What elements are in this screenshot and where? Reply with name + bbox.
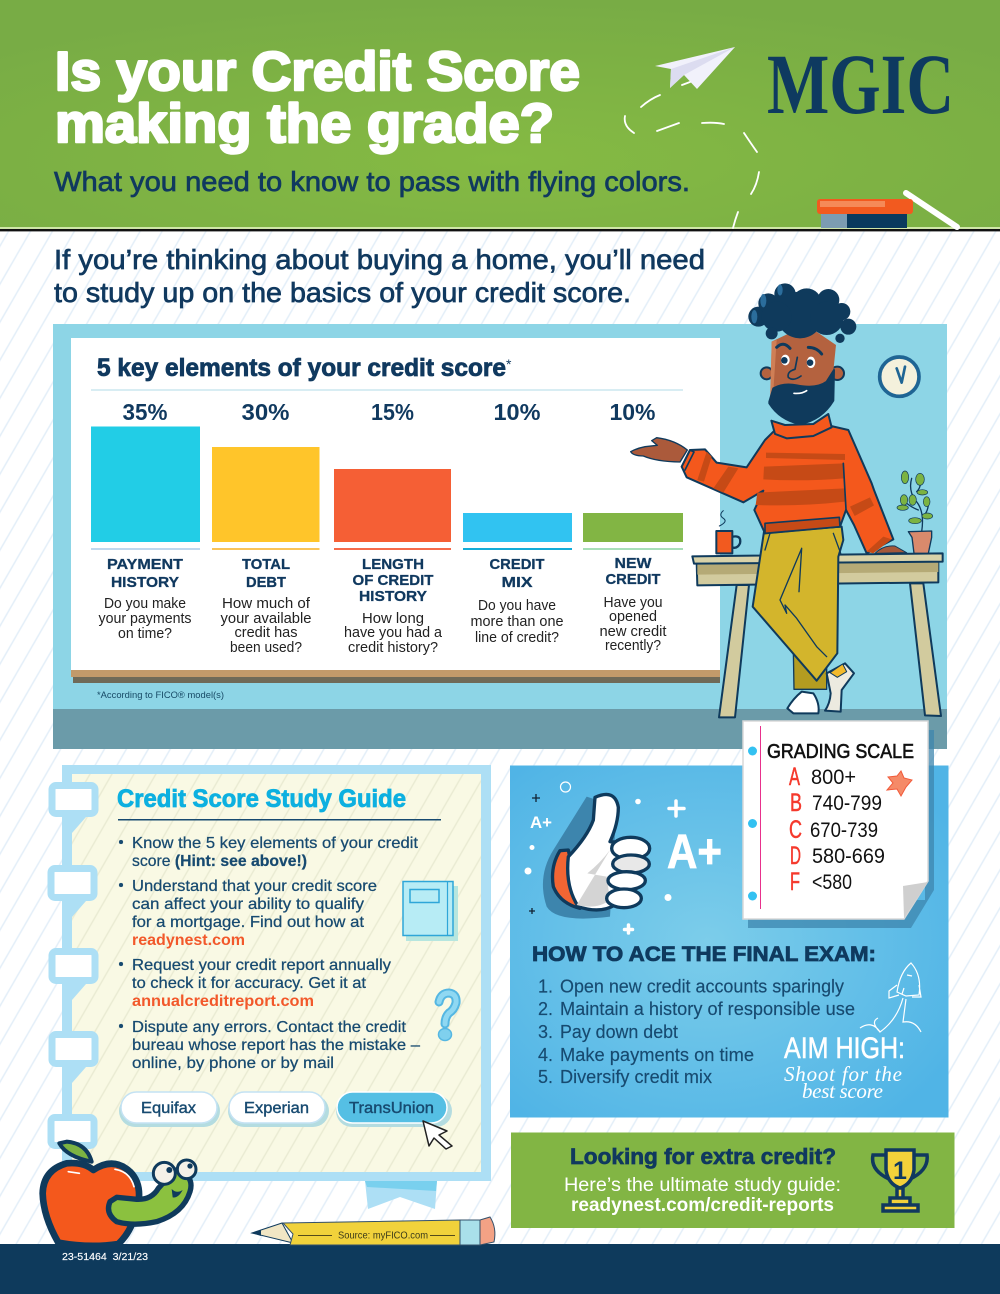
column labels: MIX xyxy=(502,574,532,591)
apple xyxy=(43,1142,139,1246)
numbered list: Maintain a history of responsible use xyxy=(560,999,855,1019)
panel: study guide notebook xyxy=(51,765,491,1181)
title xyxy=(55,40,580,154)
bar chart: 10% xyxy=(494,399,540,425)
bureau buttons: Equifax xyxy=(141,1100,196,1117)
grades: C xyxy=(789,816,802,844)
score ranges: 800+ xyxy=(811,766,856,789)
title: making the grade? xyxy=(55,92,554,154)
section heading: HOW TO ACE THE FINAL EXAM: xyxy=(532,943,876,966)
intro text: to study up on the basics of your credit score. xyxy=(54,277,631,308)
column labels: CREDIT xyxy=(606,571,660,588)
bullet list: bureau whose report has the mistake – xyxy=(132,1037,420,1054)
bullet list: Request your credit report annually xyxy=(132,957,391,974)
banner heading: Looking for extra credit? xyxy=(570,1144,836,1169)
subtitle: What you need to know to pass with flying colors. xyxy=(54,166,690,197)
numbered list: Open new credit accounts sparingly xyxy=(560,976,844,996)
panel: classroom wall xyxy=(53,324,947,749)
ribbon bookmark xyxy=(365,1181,437,1209)
column labels: DEBT xyxy=(246,574,286,591)
aim high text xyxy=(784,1032,905,1103)
numbered list: 4. xyxy=(538,1045,553,1065)
trousers xyxy=(753,527,843,681)
score ranges: <580 xyxy=(812,871,852,894)
bar chart xyxy=(91,399,683,550)
aim high text: best score xyxy=(802,1079,883,1103)
panel: how to ace the final exam xyxy=(510,766,948,1118)
column descriptions: How long xyxy=(362,611,424,627)
collar xyxy=(771,414,832,438)
icon: pencil with source xyxy=(252,1217,495,1245)
grading heading: GRADING SCALE xyxy=(767,741,914,763)
column labels: OF CREDIT xyxy=(352,572,434,589)
icon: potted plant xyxy=(897,471,933,553)
numbered list: Make payments on time xyxy=(560,1045,754,1065)
worm xyxy=(108,1160,196,1224)
score ranges xyxy=(810,766,885,894)
bullet list: online, by phone or by mail xyxy=(132,1055,334,1072)
intro text: If you’re thinking about buying a home, you’ll need xyxy=(54,244,705,275)
bar chart: 30% xyxy=(242,399,290,425)
column descriptions: new credit xyxy=(600,624,666,640)
column labels: HISTORY xyxy=(111,574,179,591)
banner text: Here’s the ultimate study guide: xyxy=(564,1175,841,1196)
bureau buttons: TransUnion xyxy=(349,1100,434,1117)
header banner xyxy=(0,0,1000,231)
column descriptions: How much of xyxy=(222,596,311,612)
bureau buttons: Experian xyxy=(244,1100,309,1117)
column descriptions: recently? xyxy=(605,638,661,654)
column labels: PAYMENT xyxy=(107,556,183,573)
column descriptions: opened xyxy=(609,609,657,625)
icon: chalk rocket xyxy=(860,963,921,1032)
grades: F xyxy=(790,868,800,896)
head xyxy=(748,283,856,424)
bar chart: 35% xyxy=(122,399,168,425)
score ranges: 670-739 xyxy=(810,819,878,842)
bullet list: score (Hint: see above!) xyxy=(132,853,307,870)
desk xyxy=(692,553,943,717)
numbered list: 1. xyxy=(538,976,553,996)
icon: book xyxy=(403,882,458,941)
banner text xyxy=(564,1175,841,1216)
sweater xyxy=(682,425,893,553)
column descriptions: Do you have xyxy=(478,598,556,614)
supporting hand xyxy=(875,546,907,553)
aim high text: Shoot for the xyxy=(784,1062,902,1086)
icon: star xyxy=(887,771,912,796)
bullet list: for a mortgage. Find out how at xyxy=(132,914,365,931)
grades: B xyxy=(790,789,802,817)
panel: whiteboard with chart xyxy=(71,338,720,683)
icon: sparkle decorations: A+ xyxy=(530,813,552,832)
numbered list: 5. xyxy=(538,1067,553,1087)
column descriptions: more than one xyxy=(470,614,564,630)
notebook rings xyxy=(51,786,95,1146)
bar chart: 15% xyxy=(371,399,414,425)
bullet list: readynest.com xyxy=(132,932,245,949)
column labels: CREDIT xyxy=(490,556,544,573)
bullet list: annualcreditreport.com xyxy=(132,993,314,1010)
bullet list xyxy=(119,835,420,1072)
icon: clock xyxy=(880,357,919,396)
illustration: teacher at desk xyxy=(631,283,943,717)
back leg and shoes xyxy=(787,650,854,713)
column labels xyxy=(107,555,660,605)
arm hand xyxy=(631,438,687,462)
grades: D xyxy=(790,842,801,870)
grades: A xyxy=(789,763,800,791)
icon: book and chalk on ledge xyxy=(817,193,957,228)
column descriptions: your payments xyxy=(98,611,192,627)
panel: extra credit banner xyxy=(511,1132,954,1228)
column descriptions: line of credit? xyxy=(475,630,559,646)
document number: 23-51464 3/21/23 xyxy=(62,1252,148,1263)
bullet list: can affect your ability to qualify xyxy=(132,896,364,913)
banner text: readynest.com/credit-reports xyxy=(571,1195,834,1216)
bullet list: to check it for accuracy. Get it at xyxy=(132,975,367,992)
column descriptions xyxy=(98,595,666,656)
column labels: TOTAL xyxy=(242,556,290,573)
icon: thumbs up xyxy=(543,794,650,919)
column descriptions: have you had a xyxy=(344,625,443,641)
numbered list xyxy=(538,976,855,1087)
guide title: Credit Score Study Guide xyxy=(117,785,406,813)
icon: coffee mug xyxy=(716,511,740,553)
column descriptions: on time? xyxy=(118,626,172,642)
footnote: *According to FICO® model(s) xyxy=(97,690,224,701)
bullet list: Dispute any errors. Contact the credit xyxy=(132,1019,407,1036)
icon: cursor xyxy=(423,1121,452,1149)
source text: Source: myFICO.com xyxy=(338,1230,428,1242)
column labels: HISTORY xyxy=(359,588,427,605)
numbered list: 3. xyxy=(538,1022,553,1042)
title: Is your Credit Score xyxy=(55,40,580,102)
grading scale paper xyxy=(743,721,934,928)
chart heading: * xyxy=(506,356,512,372)
icon: trophy: 1 xyxy=(893,1157,907,1185)
numbered list: 2. xyxy=(538,999,553,1019)
bureau buttons xyxy=(119,1092,452,1127)
score ranges: 580-669 xyxy=(812,845,885,868)
bar chart: 10% xyxy=(610,399,656,425)
icon: sparkle decorations xyxy=(524,782,684,933)
icon: paper plane with dashed trail xyxy=(625,47,759,228)
icon: trophy xyxy=(873,1150,927,1211)
illustration: apple and worm xyxy=(43,1142,196,1246)
numbered list: Diversify credit mix xyxy=(560,1067,712,1087)
score ranges: 740-799 xyxy=(812,792,882,815)
icon: question mark xyxy=(438,993,456,1040)
bullet list: Know the 5 key elements of your credit xyxy=(132,835,419,852)
column descriptions: credit history? xyxy=(348,640,438,656)
bullet list: Understand that your credit score xyxy=(132,878,377,895)
column descriptions: been used? xyxy=(230,640,302,656)
column descriptions: Do you make xyxy=(104,596,186,612)
footer bar xyxy=(0,1244,1000,1294)
chart heading: 5 key elements of your credit score xyxy=(97,354,506,382)
grades xyxy=(789,763,802,896)
intro text xyxy=(54,244,705,308)
column labels: NEW xyxy=(614,555,652,572)
numbered list: Pay down debt xyxy=(560,1022,678,1042)
large A+: A+ xyxy=(667,826,722,879)
column descriptions: credit has xyxy=(234,625,298,641)
column descriptions: your available xyxy=(220,611,312,627)
aim high text: AIM HIGH: xyxy=(784,1032,905,1065)
column labels: LENGTH xyxy=(362,556,424,573)
column descriptions: Have you xyxy=(604,595,662,611)
